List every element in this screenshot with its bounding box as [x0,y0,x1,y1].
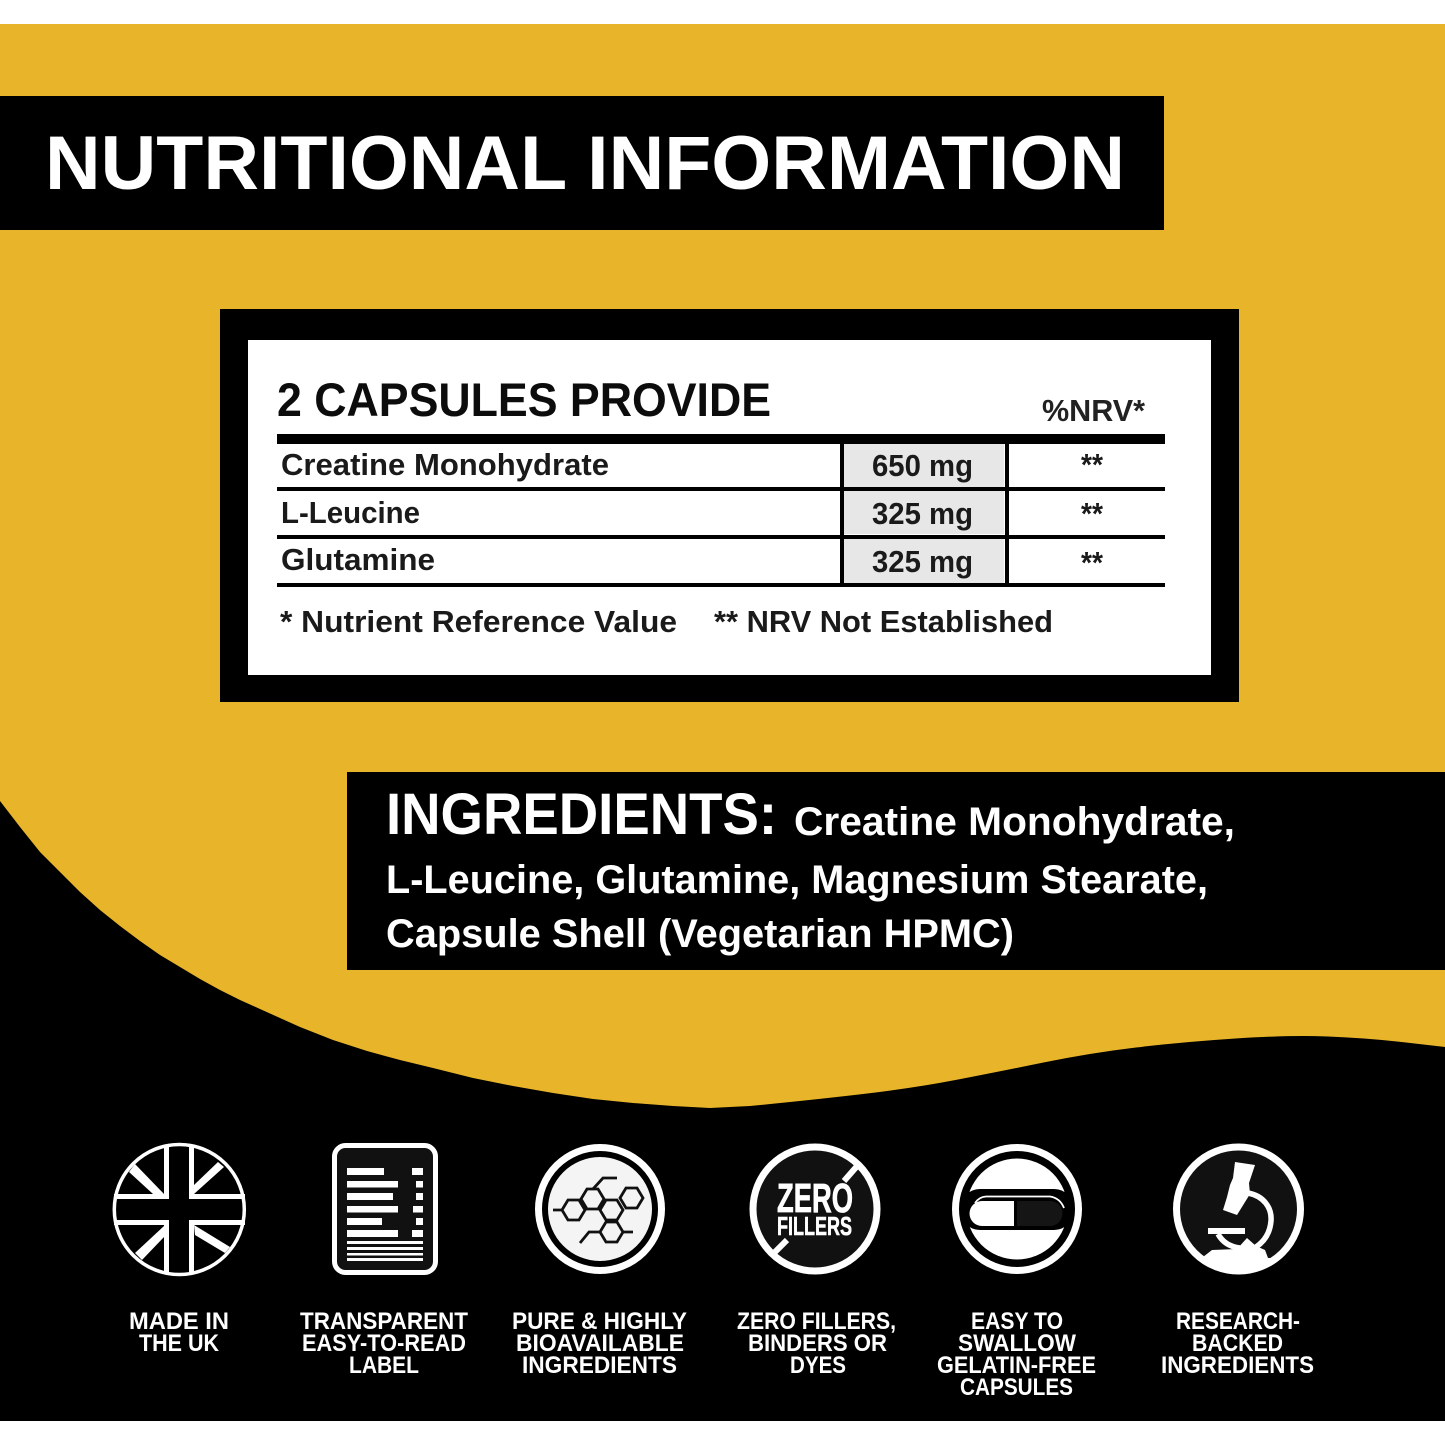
label: research backed [1161,1308,1314,1379]
table heading: 2 CAPSULES PROVIDE [277,373,771,426]
label: research backed: BACKED [1192,1330,1283,1357]
panel: ingredients: Creatine Monohydrate, [794,800,1235,844]
title banner: NUTRITIONAL INFORMATION [45,121,1125,206]
label: easy to swallow [937,1308,1096,1401]
icon: zero fillers [753,1147,877,1271]
table rules [277,434,1165,587]
table grey value cells [844,444,1004,583]
label: made in the UK: MADE IN [129,1308,229,1335]
icon: capsule [956,1148,1078,1270]
row: leucine [281,495,1104,531]
label: transparent label: TRANSPARENT [300,1308,468,1335]
label: easy to swallow: CAPSULES [960,1374,1073,1401]
panel: ingredients: Capsule Shell (Vegetarian HPMC) [386,912,1014,956]
icon: union flag [114,1144,245,1274]
panel: ingredients [347,772,1445,970]
row: creatine: 650 mg [872,448,973,483]
label: pure and bioavailable: BIOAVAILABLE [516,1330,684,1357]
row: glutamine: ** [1081,545,1104,580]
label: pure and bioavailable: PURE & HIGHLY [512,1308,687,1335]
label: research backed: INGREDIENTS [1161,1352,1314,1379]
label: zero fillers: BINDERS OR [748,1330,887,1357]
label: zero fillers: ZERO FILLERS, [737,1308,896,1335]
label: research backed: RESEARCH- [1176,1308,1300,1335]
row: leucine: 325 mg [872,496,973,531]
row: creatine [281,447,1104,483]
label: transparent label: LABEL [349,1352,419,1379]
row: creatine: ** [1081,447,1104,482]
icon: zero fillers: ZERO [777,1175,853,1221]
label: zero fillers: DYES [790,1352,846,1379]
row: creatine: Creatine Monohydrate [281,447,609,482]
icon: zero fillers: FILLERS [777,1211,852,1241]
label: easy to swallow: GELATIN-FREE [937,1352,1096,1379]
icon: nutrition label [334,1146,436,1272]
row: glutamine: Glutamine [281,542,435,577]
label: made in the UK: THE UK [139,1330,220,1357]
panel: ingredients: L-Leucine, Glutamine, Magnesium Stearate, [386,858,1208,902]
panel: nutrition table [220,309,1239,702]
label: pure and bioavailable [512,1308,687,1379]
icon: microscope [1176,1147,1300,1290]
label: transparent label: EASY-TO-READ [302,1330,466,1357]
row: glutamine: 325 mg [872,544,973,579]
background: black wave [0,801,1445,1421]
panel: ingredients: INGREDIENTS: [386,782,777,847]
row: glutamine [281,542,1104,580]
label: easy to swallow: SWALLOW [958,1330,1076,1357]
row: leucine: L-Leucine [281,495,420,530]
row: leucine: ** [1081,496,1104,531]
NRV column heading: %NRV* [1042,393,1146,428]
footnotes: ** NRV Not Established [714,604,1053,639]
label: pure and bioavailable: INGREDIENTS [522,1352,677,1379]
footnotes: * Nutrient Reference Value [280,604,677,639]
icon: molecule [538,1148,662,1270]
label: transparent label [300,1308,468,1379]
label: zero fillers [737,1308,896,1379]
title banner [0,96,1164,230]
label: easy to swallow: EASY TO [971,1308,1063,1335]
label: made in the UK [129,1308,229,1357]
footnotes [280,604,1053,639]
